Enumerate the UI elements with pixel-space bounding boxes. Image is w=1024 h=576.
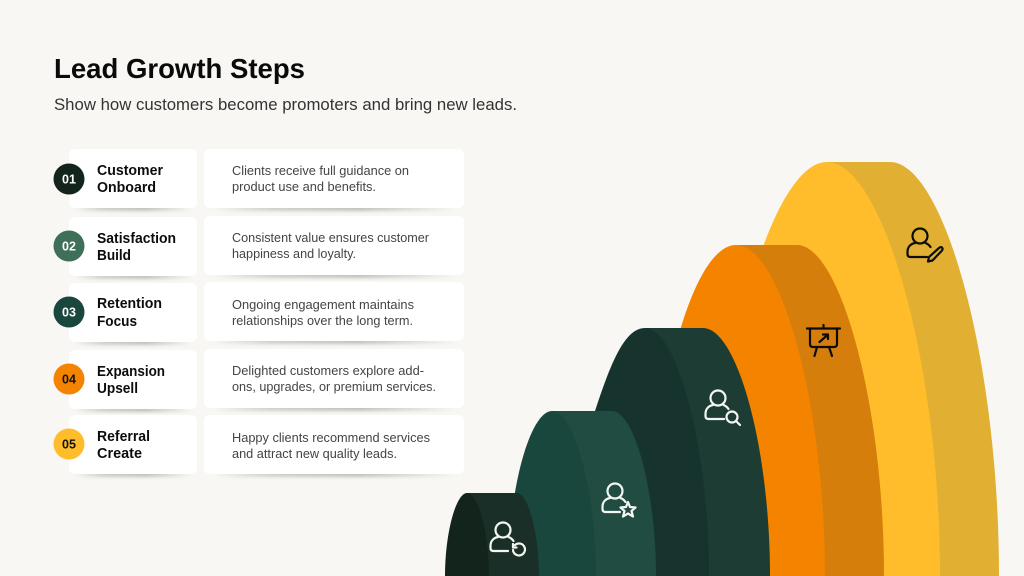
arch 3: retention (580, 328, 770, 576)
step 01 description: Clients receive full guidance on (232, 164, 409, 178)
step 02 name card (69, 217, 197, 276)
step 03 name: Focus (97, 314, 137, 330)
step 04 description: ons, upgrades, or premium services. (232, 380, 436, 394)
icon: presentation board with arrow (807, 325, 840, 356)
step 05 number badge: 05 (62, 438, 76, 452)
step 05 number badge (54, 428, 84, 460)
step 04 number badge: 04 (62, 372, 76, 386)
step 03 description: Ongoing engagement maintains (232, 298, 414, 312)
step 04 number badge (54, 364, 84, 394)
step 01 name: Onboard (97, 180, 156, 196)
icon: person with pencil (908, 228, 943, 262)
step 02 description card (204, 216, 464, 275)
step 05 name: Create (97, 446, 142, 462)
step 03 name card (69, 283, 197, 342)
step 05 description card (204, 415, 464, 474)
step 04 description card (204, 349, 464, 408)
step 04 name card (69, 350, 197, 409)
step 04 description: Delighted customers explore add- (232, 364, 424, 378)
step 02 description: happiness and loyalty. (232, 247, 356, 261)
arch 2: satisfaction (508, 411, 656, 576)
icon: person with refresh (490, 522, 525, 555)
step 05 description: Happy clients recommend services (232, 431, 430, 445)
subtitle: Show how customers become promoters and bring new leads. (54, 95, 517, 114)
step 01 description card (204, 149, 464, 208)
step 01 name card (69, 149, 197, 208)
step 05 name: Referral (97, 429, 150, 445)
icon: person with star (602, 484, 636, 516)
step 05 description: and attract new quality leads. (232, 447, 397, 461)
arch 5: referral (714, 162, 999, 576)
step 03 number badge (54, 296, 84, 328)
step 02 name: Build (97, 248, 131, 264)
step 02 name: Satisfaction (97, 231, 176, 247)
step 01 name: Customer (97, 163, 163, 179)
arch 4: expansion (649, 245, 884, 576)
step 01 number badge (54, 164, 84, 194)
step 04 name: Expansion (97, 364, 165, 380)
step 01 number badge: 01 (62, 172, 76, 186)
step 05 row (54, 415, 464, 477)
step 03 name: Retention (97, 296, 162, 312)
arch 1: onboard (445, 493, 539, 576)
step 01 row (54, 149, 464, 211)
step 04 row (54, 349, 464, 412)
step 03 description: relationships over the long term. (232, 314, 413, 328)
step 02 number badge (54, 230, 84, 262)
step 03 number badge: 03 (62, 306, 76, 320)
step 01 description: product use and benefits. (232, 180, 376, 194)
step 03 row (54, 282, 464, 345)
step 02 description: Consistent value ensures customer (232, 231, 429, 245)
title: Lead Growth Steps (54, 53, 305, 84)
step 02 number badge: 02 (62, 240, 76, 254)
step 05 name card (69, 415, 197, 474)
step 04 name: Upsell (97, 381, 138, 397)
step 02 row (54, 216, 464, 279)
icon: person with magnifier (706, 390, 740, 425)
step 03 description card (204, 282, 464, 341)
